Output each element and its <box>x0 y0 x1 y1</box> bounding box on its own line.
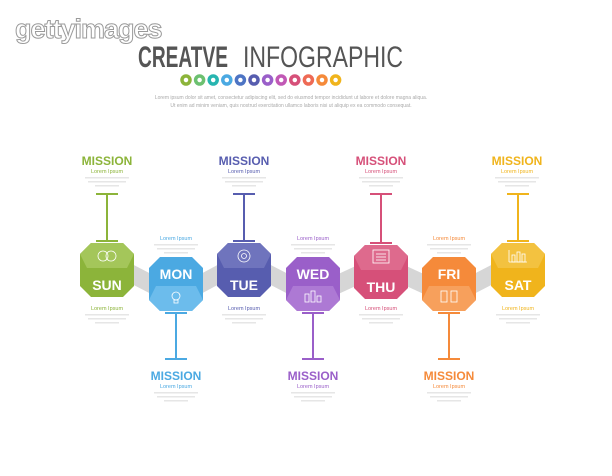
title <box>138 41 403 74</box>
day: WED: Lorem Ipsum <box>297 236 329 242</box>
subtitle text <box>155 95 427 109</box>
title: INFOGRAPHIC <box>243 41 403 74</box>
day: THU: THU <box>367 279 395 295</box>
day: WED: WED <box>297 266 329 282</box>
day: WED: Lorem Ipsum <box>297 384 329 390</box>
day: FRI: Lorem Ipsum <box>433 384 465 390</box>
day: THU: MISSION <box>356 154 406 168</box>
day: SAT: MISSION <box>492 154 542 168</box>
day: FRI: FRI <box>438 266 460 282</box>
day: THU <box>354 154 408 324</box>
day: SUN: Lorem Ipsum <box>91 169 123 175</box>
day: SUN: Lorem Ipsum <box>91 306 123 312</box>
day: TUE <box>217 154 271 324</box>
day: THU: Lorem Ipsum <box>365 169 397 175</box>
color dots row <box>182 76 340 84</box>
day: SUN: MISSION <box>82 154 132 168</box>
day: SAT: Lorem Ipsum <box>502 306 534 312</box>
day: FRI: Lorem Ipsum <box>433 236 465 242</box>
subtitle text: Lorem ipsum dolor sit amet, consectetur adipiscing elit, sed do eiusmod tempor incididunt ut labore et dolore magna aliqua. <box>155 95 427 101</box>
day: MON: Lorem Ipsum <box>160 236 192 242</box>
day: FRI <box>422 236 476 402</box>
day: TUE: Lorem Ipsum <box>228 306 260 312</box>
day: TUE: TUE <box>230 277 258 293</box>
title: CREATVE <box>138 41 228 74</box>
day: MON: MISSION <box>151 369 201 383</box>
subtitle text: Ut enim ad minim veniam, quis nostrud exercitation ullamco laboris nisi ut aliquip ex ea commodo consequat. <box>170 103 412 109</box>
day: SUN <box>80 154 134 324</box>
day: TUE: Lorem Ipsum <box>228 169 260 175</box>
watermark: gettyimages <box>15 14 162 44</box>
day: TUE: MISSION <box>219 154 269 168</box>
day: MON: Lorem Ipsum <box>160 384 192 390</box>
day: MON: MON <box>160 266 192 282</box>
day: WED <box>286 236 340 402</box>
day: THU: Lorem Ipsum <box>365 306 397 312</box>
day: SAT <box>491 154 545 324</box>
day: SAT: Lorem Ipsum <box>501 169 533 175</box>
day: MON <box>149 236 203 402</box>
gray connectors <box>128 262 497 296</box>
day: SAT: SAT <box>505 277 532 293</box>
day: FRI: MISSION <box>424 369 474 383</box>
day: WED: MISSION <box>288 369 338 383</box>
day: SUN: SUN <box>92 277 122 293</box>
